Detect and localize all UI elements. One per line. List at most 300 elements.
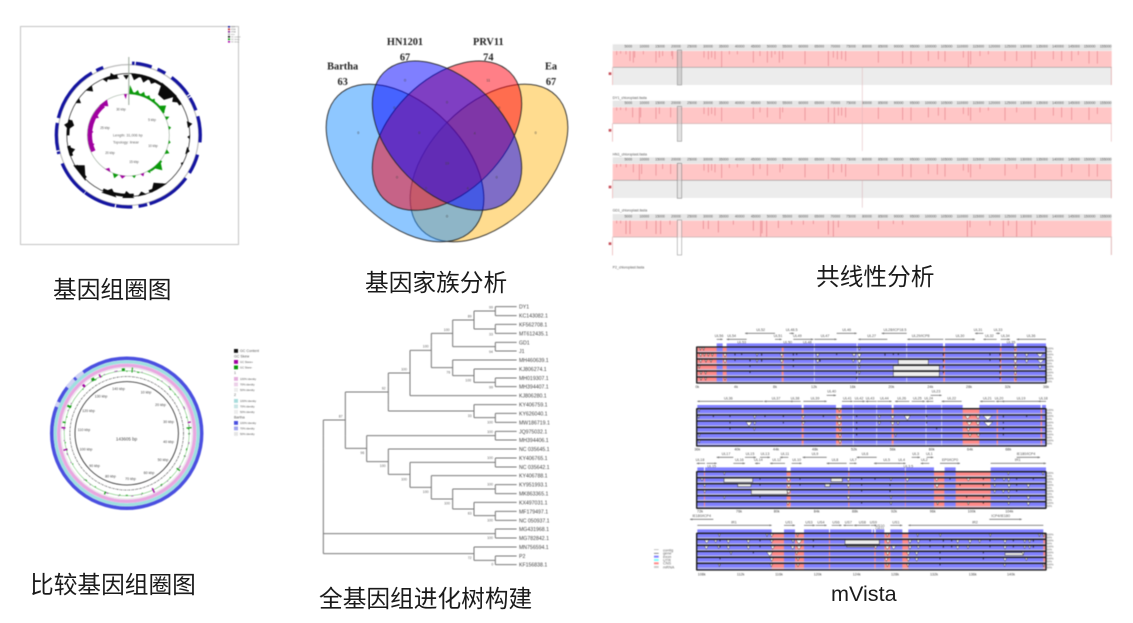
- tree tip labels: KF156838.1: [519, 563, 547, 569]
- gene annotations row 1: UL30: [956, 334, 964, 338]
- tree tip labels: NC 050937.1: [519, 518, 550, 524]
- gene annotations row 1: UL51: [774, 334, 782, 338]
- gene annotations row 4: US1: [892, 520, 900, 524]
- alignment track 1: 105000: [941, 45, 953, 49]
- gene annotations row 3: UL12: [772, 458, 781, 462]
- alignment track 1: 40000: [735, 45, 745, 49]
- alignment track 4: 55000: [782, 214, 792, 218]
- gene annotations row 2: UL43: [866, 396, 874, 400]
- alignment track 4: 100000: [925, 214, 937, 218]
- venn counts: 0: [404, 78, 406, 82]
- gene annotations row 3: UL1: [926, 452, 933, 456]
- axis and percent labels row 1: 50%: [1047, 379, 1053, 383]
- GC skew marks: [61, 368, 192, 495]
- mVista row 3: [696, 452, 1054, 514]
- axis and percent labels row 1: 100%: [1047, 352, 1054, 356]
- legend: mVista features: UTR: [663, 558, 671, 562]
- axis and percent labels row 2: 50%: [1047, 417, 1053, 421]
- legend: comparative circle: 100% identity: [240, 377, 257, 381]
- gene annotations row 3: UL15: [746, 452, 754, 456]
- alignment track 3: 95000: [910, 158, 920, 162]
- kbp labels: comparative circle: 140 kbp: [112, 387, 125, 391]
- alignment track 3: 155000: [1100, 158, 1112, 162]
- legend: genome circle map: rRNA: [231, 30, 236, 34]
- axis and percent labels row 2: 50%: [1047, 411, 1053, 415]
- alignment track 1: 30000: [703, 45, 713, 49]
- bootstrap values: 63: [468, 512, 472, 516]
- axis and percent labels row 1: 100%: [1047, 364, 1054, 368]
- venn counts: 0: [498, 106, 500, 110]
- kbp labels: genome circle map: 30 kbp: [116, 108, 126, 112]
- alignment track 3: 20000: [671, 158, 681, 162]
- axis and percent labels row 4: 50%: [1047, 542, 1053, 546]
- mVista row 1: [695, 328, 1054, 389]
- alignment track 1: 140000: [1052, 45, 1064, 49]
- heading: mVista: mVista: [831, 581, 898, 606]
- venn counts: 0: [393, 106, 395, 110]
- alignment track 3: 130000: [1020, 158, 1032, 162]
- legend: mVista features: CNS: [663, 562, 672, 566]
- venn ellipses: [297, 33, 597, 271]
- alignment track 4: 140000: [1052, 214, 1064, 218]
- alignment track 2: 45000: [751, 101, 761, 105]
- alignment track 4: 130000: [1020, 214, 1032, 218]
- axis and percent labels row 1: 100%: [1047, 376, 1054, 380]
- legend: comparative circle: 50% identity: [240, 388, 255, 392]
- axis and percent labels row 1: 50%: [1047, 349, 1053, 353]
- alignment track 2: 55000: [782, 101, 792, 105]
- gene annotations row 2: UL23: [932, 390, 940, 394]
- axis and percent labels row 2: 50%: [1047, 423, 1053, 427]
- alignment track 1: 80000: [862, 45, 872, 49]
- gene annotations row 3: UL17: [722, 452, 730, 456]
- gene annotations row 3: IE180/ICP4: [1017, 452, 1035, 456]
- tree tip labels: KJ806274.1: [519, 367, 547, 373]
- venn counts: 0: [446, 214, 448, 218]
- gene annotations row 2: UL38: [791, 396, 799, 400]
- tree tip labels: MH019307.1: [519, 376, 549, 382]
- alignment track 4: 10000: [639, 214, 649, 218]
- alignment track 3: 65000: [814, 158, 824, 162]
- alignment track 2: 60000: [798, 101, 808, 105]
- axis and percent labels row 4: 108k: [698, 572, 706, 576]
- alignment track 1: 10000: [639, 45, 649, 49]
- alignment track 2: 20000: [671, 101, 681, 105]
- kbp labels: comparative circle: 70 kbp: [125, 477, 136, 481]
- axis and percent labels row 3: 100%: [1047, 489, 1054, 493]
- tree tip labels: KJ806280.1: [519, 394, 547, 400]
- alignment track 1: 100000: [925, 45, 937, 49]
- alignment track 3: 120000: [989, 158, 1000, 162]
- legend: comparative circle: [234, 349, 259, 436]
- tree tip labels: NC 035642.1: [519, 465, 550, 471]
- alignment track 2: 100000: [925, 101, 937, 105]
- gene annotations row 4: US9: [870, 520, 877, 524]
- gene annotations row 3: UL11: [781, 452, 789, 456]
- bootstrap values: 99: [489, 306, 493, 310]
- alignment track 4: 85000: [878, 214, 888, 218]
- legend: comparative circle: GC Skew+: [240, 360, 253, 364]
- axis and percent labels row 1: 12k: [811, 385, 817, 389]
- axis and percent labels row 1: [695, 346, 1054, 389]
- axis and percent labels row 4: 100%: [1047, 539, 1054, 543]
- alignment track 2: 50000: [767, 101, 777, 105]
- axis and percent labels row 1: 8k: [773, 385, 777, 389]
- alignment track 2: 150000: [1084, 101, 1096, 105]
- gene annotations row 1: UL34: [1001, 334, 1010, 338]
- gene annotations row 1: UL48.5: [786, 328, 798, 332]
- gene annotations row 4: US11: [876, 527, 884, 531]
- alignment track 3: 45000: [751, 158, 761, 162]
- axis and percent labels row 4: 128k: [891, 572, 899, 576]
- alignment track 1: 85000: [878, 45, 888, 49]
- alignment track 4: 45000: [751, 214, 761, 218]
- venn counts: 4: [474, 131, 476, 135]
- axis and percent labels row 1: 50%: [1047, 361, 1053, 365]
- axis and percent labels row 4: 100%: [1047, 545, 1054, 549]
- venn counts: 19: [445, 162, 449, 166]
- venn counts: 0: [496, 175, 498, 179]
- legend: genome circle map: CDS: [231, 26, 236, 28]
- alignment track 3: 150000: [1084, 158, 1096, 162]
- legend: genome circle map: GC skew+: [231, 39, 241, 41]
- heading: whole genome phylogenetic tree: 全基因组进化树构建: [319, 586, 532, 613]
- alignment track 1: 125000: [1005, 45, 1016, 49]
- alignment track 4: 20000: [671, 214, 681, 218]
- axis and percent labels row 3: 50%: [1047, 504, 1053, 508]
- gene annotations row 1: UL47: [821, 334, 829, 338]
- gene annotations row 3: UL8: [832, 458, 838, 462]
- bootstrap values: 100: [401, 477, 407, 481]
- alignment track 3: 40000: [735, 158, 745, 162]
- axis and percent labels row 2: 100%: [1047, 439, 1054, 443]
- alignment track 1: 55000: [782, 45, 792, 49]
- alignment track 4: 120000: [989, 214, 1000, 218]
- alignment track 1: 50000: [767, 45, 777, 49]
- kbp labels: comparative circle: 90 kbp: [89, 464, 100, 468]
- legend: comparative circle: 70% identity: [240, 382, 255, 386]
- tree tip labels: KX497031.1: [519, 500, 548, 506]
- tree tip labels: MW186719.1: [519, 420, 550, 426]
- panel: collinearity alignment: [609, 44, 1112, 269]
- gene annotations row 4: [690, 514, 1043, 531]
- GC content ring: [63, 71, 193, 198]
- alignment track 4: 70000: [830, 214, 840, 218]
- alignment track 2: 15000: [655, 101, 665, 105]
- kbp labels: comparative circle: 100 kbp: [80, 448, 92, 452]
- gene annotations row 3: UL3: [912, 452, 919, 456]
- legend: genome circle map: misc: [231, 34, 235, 36]
- axis and percent labels row 2: 100%: [1047, 433, 1054, 437]
- legend: comparative circle: 70% identity: [240, 426, 255, 430]
- venn set labels: [327, 37, 557, 88]
- gene annotations row 1: UL29/ICP8: [912, 334, 930, 338]
- legend: mVista features: gene: [663, 552, 672, 556]
- alignment track 2: HN1_chloroplast.fasta: [613, 152, 647, 156]
- alignment track 4: 95000: [910, 214, 920, 218]
- tree tip labels: NC 035645.1: [519, 447, 550, 453]
- gene annotations row 2: UL41: [843, 396, 852, 400]
- alignment track 3: 90000: [894, 158, 904, 162]
- tree tip labels: MN756594.1: [519, 545, 549, 551]
- axis and percent labels row 1: 16k: [850, 385, 856, 389]
- gene annotations row 1: UL31: [974, 328, 982, 332]
- bootstrap values: 100: [423, 345, 429, 349]
- axis and percent labels row 2: 36k: [694, 448, 700, 452]
- axis and percent labels row 3: 100%: [1047, 477, 1054, 481]
- axis and percent labels row 2: 100%: [1047, 408, 1054, 412]
- venn set labels: Ea: [545, 61, 557, 72]
- axis and percent labels row 2: 52k: [851, 448, 857, 452]
- bootstrap values: 33: [489, 332, 493, 336]
- bootstrap values: 100: [444, 502, 450, 506]
- comparison rings: [52, 358, 202, 508]
- alignment track 4: 25000: [687, 214, 697, 218]
- alignment track 2: 130000: [1020, 101, 1032, 105]
- alignment track 4: 65000: [814, 214, 824, 218]
- axis and percent labels row 2: 60k: [929, 448, 935, 452]
- alignment track 4: 60000: [798, 214, 808, 218]
- alignment track 1: 75000: [846, 45, 856, 49]
- gene annotations row 2: UL21: [983, 396, 992, 400]
- alignment track 4: 105000: [941, 214, 953, 218]
- axis and percent labels row 1: 20k: [888, 385, 894, 389]
- kbp labels: comparative circle: 40 kbp: [163, 440, 174, 444]
- alignment track 3: 100000: [925, 158, 937, 162]
- tree tip labels: MT612435.1: [519, 331, 548, 337]
- gene annotations row 3: UL2: [921, 458, 928, 462]
- tree tip labels: KY406759.1: [519, 403, 548, 409]
- tree tip labels: JQ975032.1: [519, 429, 547, 435]
- tree tip labels: KY951993.1: [519, 483, 548, 489]
- alignment track 3: 85000: [878, 158, 888, 162]
- alignment track 1: 135000: [1036, 45, 1048, 49]
- panel: mVista alignment: [654, 328, 1054, 576]
- bootstrap values: 100: [487, 430, 493, 434]
- axis and percent labels row 4: 136k: [969, 572, 977, 576]
- gene annotations row 1: UL46: [842, 328, 851, 332]
- venn set labels: 63: [338, 77, 348, 88]
- gene annotations row 3: UL4: [898, 458, 905, 462]
- axis and percent labels row 4: 50%: [1047, 566, 1053, 570]
- alignment track 4: 80000: [862, 214, 872, 218]
- venn counts: 4: [467, 187, 469, 191]
- alignment track 3: 80000: [862, 158, 872, 162]
- heading: genome circle map: 基因组圈图: [53, 277, 171, 304]
- tree tip labels: J1: [519, 349, 525, 355]
- axis and percent labels row 2: 64k: [967, 448, 973, 452]
- alignment track 4: 155000: [1100, 214, 1112, 218]
- alignment track 1: 155000: [1100, 45, 1112, 49]
- gene annotations row 1: UL27: [867, 334, 876, 338]
- bootstrap values: 100: [487, 518, 493, 522]
- alignment track 4: 15000: [655, 214, 665, 218]
- axis and percent labels row 2: 48k: [812, 448, 818, 452]
- tree tip labels: KY626040.1: [519, 411, 548, 417]
- gene annotations row 3: UL15: [707, 464, 716, 468]
- alignment track 2: 70000: [830, 101, 840, 105]
- tree tip labels: KY406788.1: [519, 474, 548, 480]
- axis and percent labels row 4: 132k: [930, 572, 938, 576]
- alignment track 3: [609, 157, 1112, 213]
- gene annotations row 3: [696, 452, 1046, 468]
- bootstrap values: 89: [468, 314, 472, 318]
- axis and percent labels row 2: 100%: [1047, 426, 1054, 430]
- venn counts: 11: [486, 78, 490, 82]
- gene annotations row 1: UL50: [783, 340, 792, 344]
- bootstrap values: 100: [465, 379, 471, 383]
- legend: comparative circle: Bartha: [234, 416, 245, 420]
- gene annotations row 2: UL24: [924, 396, 933, 400]
- gene annotations row 3: UL10: [792, 458, 801, 462]
- tree tip labels: P2: [519, 554, 525, 560]
- alignment track 2: 95000: [910, 101, 920, 105]
- gene annotations row 4: IR1: [731, 520, 737, 524]
- gene annotations row 2: UL22: [947, 396, 956, 400]
- alignment track 2: 80000: [862, 101, 872, 105]
- alignment track 3: 25000: [687, 158, 697, 162]
- gene annotations row 2: UL20: [995, 396, 1003, 400]
- alignment track 4: 90000: [894, 214, 904, 218]
- alignment track 2: 140000: [1052, 101, 1064, 105]
- gene annotations row 2: UL25: [913, 396, 922, 400]
- legend: comparative circle: 70% identity: [240, 404, 255, 408]
- venn set labels: HN1201: [387, 37, 423, 48]
- alignment track 2: 135000: [1036, 101, 1048, 105]
- gene annotations row 4: US8: [859, 520, 866, 524]
- alignment track 1: 145000: [1068, 45, 1080, 49]
- tree tip labels: DY1: [519, 305, 529, 311]
- alignment tracks row 1: [697, 343, 1046, 383]
- tree tip labels: KF562708.1: [519, 322, 547, 328]
- axis and percent labels row 2: 68k: [1005, 448, 1011, 452]
- bootstrap values: 100: [487, 483, 493, 487]
- axis and percent labels row 3: 100%: [1047, 471, 1054, 475]
- venn counts: 0: [418, 131, 420, 135]
- alignment track 2: 10000: [639, 101, 649, 105]
- axis and percent labels row 4: 100%: [1047, 551, 1054, 555]
- axis and percent labels row 3: 100%: [1047, 501, 1054, 505]
- legend: genome circle map: GC skew-: [231, 42, 240, 44]
- bootstrap values: 96: [360, 451, 364, 455]
- legend: genome circle map: GC content: [231, 36, 241, 38]
- gene annotations row 2: UL26: [897, 396, 906, 400]
- alignment track 2: 75000: [846, 101, 856, 105]
- tree tip labels: MH394407.1: [519, 385, 549, 391]
- alignment track 2: 5000: [624, 101, 632, 105]
- bootstrap values: 100: [487, 421, 493, 425]
- gene annotations row 4: US3: [805, 520, 813, 524]
- axis and percent labels row 3: 72k: [697, 510, 703, 514]
- kbp labels: genome circle map: 25 kbp: [100, 126, 110, 130]
- axis and percent labels row 3: 50%: [1047, 492, 1053, 496]
- gene annotations row 3: IR1: [1015, 458, 1021, 462]
- tree tip labels: MG431968.1: [519, 527, 549, 533]
- kbp labels: genome circle map: 10 kbp: [148, 144, 158, 148]
- axis and percent labels row 3: 104k: [1005, 510, 1013, 514]
- gene annotations row 1: UL48: [803, 340, 812, 344]
- heading: gene family analysis: 基因家族分析: [365, 270, 507, 297]
- gene annotations row 3: UL16: [735, 458, 744, 462]
- alignment track 1: 25000: [687, 45, 697, 49]
- axis and percent labels row 4: 50%: [1047, 560, 1053, 564]
- venn counts: 0: [535, 131, 537, 135]
- legend: comparative circle: 2: [234, 393, 236, 397]
- axis and percent labels row 3: 96k: [930, 510, 936, 514]
- bootstrap values: 100: [380, 464, 386, 468]
- axis and percent labels row 4: [698, 533, 1054, 576]
- alignment track 3: 115000: [973, 158, 984, 162]
- alignment track 3: 135000: [1036, 158, 1048, 162]
- alignment track 2: 105000: [941, 101, 953, 105]
- legend: mVista features: contig: [663, 548, 673, 552]
- gene annotations row 2: [697, 390, 1048, 401]
- tree tip labels: KY406765.1: [519, 456, 548, 462]
- alignment track 1: 20000: [671, 45, 681, 49]
- alignment track 4: 40000: [735, 214, 745, 218]
- alignment track 2: 145000: [1068, 101, 1080, 105]
- axis and percent labels row 1: 100%: [1047, 370, 1054, 374]
- kbp labels: genome circle map: 15 kbp: [129, 160, 139, 164]
- axis and percent labels row 3: 100%: [1047, 495, 1054, 499]
- alignment track 2: 115000: [973, 101, 984, 105]
- axis and percent labels row 3: 80k: [774, 510, 780, 514]
- axis and percent labels row 1: 4k: [734, 385, 738, 389]
- axis and percent labels row 2: 100%: [1047, 414, 1054, 418]
- venn counts: 0: [446, 101, 448, 105]
- alignment track 4: 150000: [1084, 214, 1096, 218]
- tree tip labels: MG782842.1: [519, 536, 549, 542]
- legend: comparative circle: 100% identity: [240, 421, 257, 425]
- alignment track 2: 125000: [1005, 101, 1016, 105]
- axis and percent labels row 2: 44k: [773, 448, 779, 452]
- venn set labels: Bartha: [327, 61, 358, 72]
- alignment track 3: 110000: [957, 158, 968, 162]
- legend: mVista features: [654, 548, 675, 569]
- alignment track 4: 145000: [1068, 214, 1080, 218]
- panel: gene family venn diagram: [297, 33, 597, 271]
- alignment track 1: [609, 44, 1112, 100]
- kbp labels: comparative circle: 20 kbp: [155, 403, 166, 407]
- axis and percent labels row 3: 50%: [1047, 486, 1053, 490]
- axis and percent labels row 2: 50%: [1047, 429, 1053, 433]
- alignment track 4: 115000: [973, 214, 984, 218]
- gene annotations row 3: UL14: [754, 458, 763, 462]
- bootstrap values: 72: [468, 556, 472, 560]
- alignment tracks row 4: [697, 529, 1046, 570]
- gene annotations row 1: UL33: [994, 328, 1002, 332]
- gene annotations row 4: US1: [785, 520, 793, 524]
- axis and percent labels row 1: 28k: [966, 385, 972, 389]
- axis and percent labels row 1: 32k: [1005, 385, 1011, 389]
- alignment track 3: 105000: [941, 158, 953, 162]
- gene annotations row 3: UL7: [850, 458, 857, 462]
- alignment track 3: 60000: [798, 158, 808, 162]
- axis and percent labels row 3: 88k: [852, 510, 858, 514]
- tree tip labels: MH394406.1: [519, 438, 549, 444]
- venn set labels: 74: [483, 53, 493, 64]
- venn counts: 0: [396, 175, 398, 179]
- legend: mVista features: mRNA: [663, 565, 675, 569]
- kbp labels: comparative circle: 10 kbp: [141, 390, 151, 394]
- gene annotations row 3: UL3.5: [903, 464, 913, 468]
- gene annotations row 4: IR2: [972, 520, 978, 524]
- alignment track 3: 15000: [655, 158, 665, 162]
- center label: 143605 bp: 143605 bp: [116, 436, 138, 441]
- gene annotations row 4: US7: [845, 520, 852, 524]
- axis and percent labels row 1: 50%: [1047, 367, 1053, 371]
- alignment track 2: 120000: [989, 101, 1000, 105]
